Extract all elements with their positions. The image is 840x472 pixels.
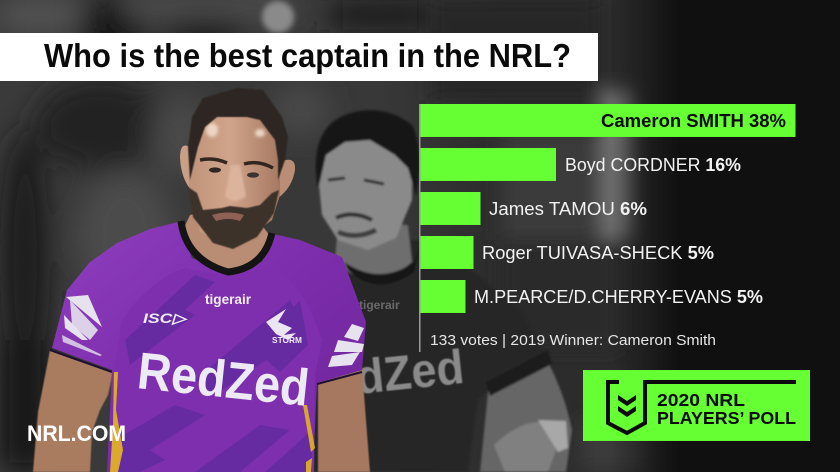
left sleeve stripes: [62, 295, 102, 356]
sleeve cuff: [486, 350, 552, 396]
icon: NRL shield: [608, 382, 796, 433]
tigerair logo: tigerair: [205, 291, 252, 307]
gold side piping: [110, 372, 123, 472]
players poll badge: [583, 370, 810, 441]
bar: James Tamou: James TAMOU 6%: [489, 198, 647, 219]
right sleeve stripes: [328, 324, 364, 367]
neck: [335, 222, 412, 279]
ears: [180, 146, 191, 190]
left arm: [33, 350, 113, 472]
jersey lightning pattern: [112, 275, 312, 472]
votes note: 133 votes | 2019 Winner: Cameron Smith: [430, 332, 716, 349]
bar: Boyd Cordner: [420, 148, 741, 181]
face: [318, 135, 412, 250]
eyebrows and eyes: [200, 159, 227, 163]
white blob top: [262, 1, 294, 33]
players poll badge: PLAYERS’ POLL: [657, 408, 796, 428]
bar: Pearce / Cherry-Evans: M.PEARCE/D.CHERRY-EVANS 5%: [474, 286, 763, 307]
bar: Roger Tuivasa-Sheck: Roger TUIVASA-SHECK 5%: [482, 242, 714, 263]
main player: Cameron Smith: [33, 88, 370, 472]
title banner: Who is the best captain in the NRL?: [44, 37, 571, 74]
hair: [188, 88, 288, 180]
hair: [316, 110, 419, 196]
beard: [188, 187, 279, 249]
black collar: [181, 221, 272, 272]
RedZed sponsor logo: RedZed: [135, 342, 312, 418]
bar: James Tamou: [420, 192, 647, 225]
forehead highlights: [206, 123, 218, 137]
right arm: [318, 368, 370, 472]
nose: [225, 165, 246, 201]
bar: Cameron Smith: [420, 104, 796, 137]
Storm logo: STORM: [272, 335, 302, 345]
Storm logo: [266, 309, 302, 345]
bar: Boyd Cordner: Boyd CORDNER 16%: [565, 154, 741, 175]
wrist band: [538, 420, 568, 452]
torso: [313, 240, 545, 472]
bar: Pearce / Cherry-Evans: [420, 280, 763, 313]
bar chart: [419, 104, 796, 352]
mouth: [212, 212, 244, 221]
bar: Cameron Smith: Cameron SMITH 38%: [601, 110, 786, 131]
face: [189, 108, 280, 248]
ISC logo: ISC▷: [143, 310, 189, 326]
background jersey sponsors: tigerair: [359, 298, 400, 312]
jersey body: [52, 222, 366, 472]
background player: Brandon Smith: [313, 110, 572, 472]
background player: Brandon Smith: dZed: [354, 341, 467, 405]
NRL.COM logo: NRL.COM: [27, 421, 126, 446]
bar: Roger Tuivasa-Sheck: [420, 236, 714, 269]
arm: [480, 362, 572, 472]
hand: [494, 422, 556, 472]
neck: [182, 205, 270, 270]
brows, mouth: [328, 178, 384, 184]
players poll badge: 2020 NRL: [657, 390, 745, 410]
